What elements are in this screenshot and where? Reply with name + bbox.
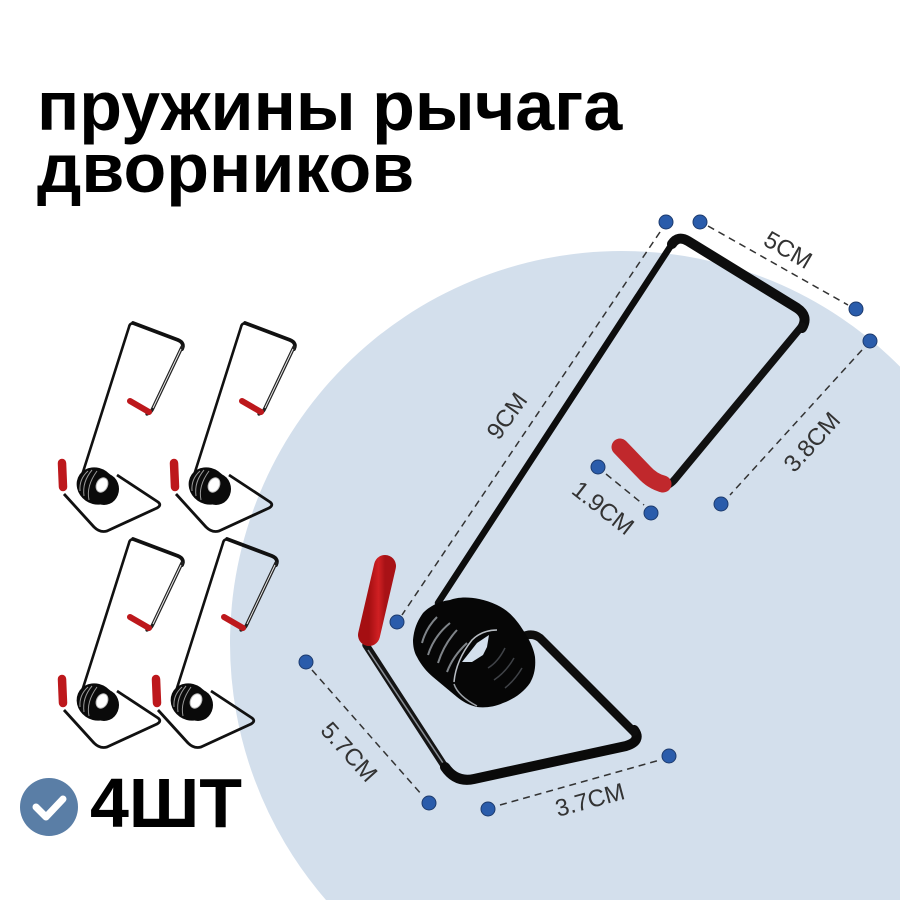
dimension: 9CM [390,215,673,629]
title: дворников [37,129,414,207]
long wire [438,244,672,603]
small spring 2 [174,323,295,532]
icon: check badge [20,778,78,836]
dimension: 3.7CM [481,749,676,823]
small spring 1 [62,323,183,532]
small spring 4 [156,539,277,748]
lower wire frame [366,645,445,767]
small spring 3 [62,539,183,748]
title: пружины рычага [37,67,623,145]
dimension: 1.9CM [567,460,658,541]
title [37,67,623,207]
dimension: 3.7CM: 3.7CM [552,778,628,823]
top and right wire [672,239,805,328]
dimension: 3.8CM [714,334,877,511]
dimension: 9CM: 9CM [482,388,533,445]
dimension: 5.7CM [299,655,436,810]
quantity label: 4ШТ [90,764,242,842]
red hook tip [620,447,663,484]
dimension: 1.9CM: 1.9CM [567,476,639,541]
dimension: 3.8CM: 3.8CM [779,407,846,478]
dimension: 5CM: 5CM [759,226,816,275]
dimension: 5CM [693,215,863,316]
coil [413,598,535,707]
large spring diagram [366,239,805,780]
background circle [230,251,900,900]
dimension: 5.7CM: 5.7CM [315,717,382,788]
red end cap [369,566,385,635]
